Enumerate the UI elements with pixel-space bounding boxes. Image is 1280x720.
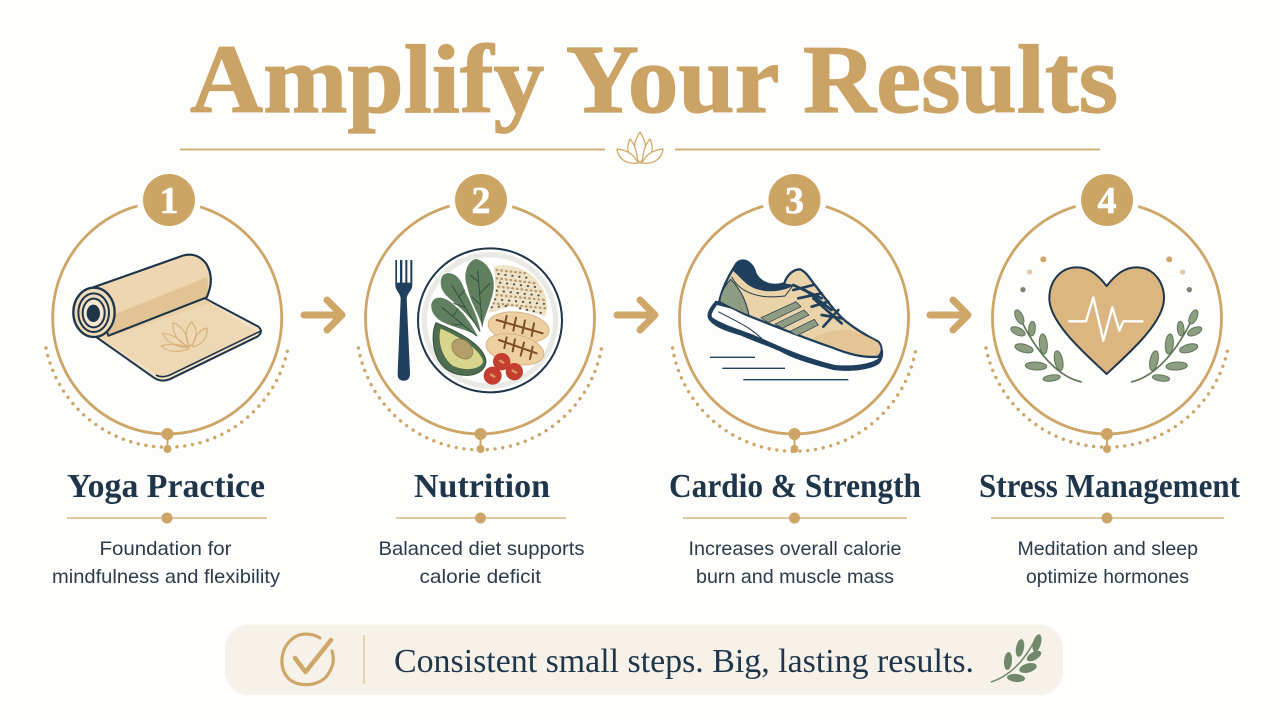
callout text: Consistent small steps. Big, lasting results. [394, 643, 974, 680]
sole [708, 301, 883, 371]
arrow 1 [304, 300, 342, 330]
spinach [431, 258, 494, 338]
right branch [1131, 309, 1203, 382]
badge 4: 4 [1098, 180, 1116, 222]
pulse line [1068, 297, 1143, 341]
badge 3 [762, 168, 826, 232]
heading 1: Yoga Practice [67, 468, 265, 505]
decorative dots [1020, 256, 1192, 292]
step 4: stress management [979, 168, 1241, 588]
badge 3: 3 [785, 180, 804, 222]
ring 1 [46, 202, 288, 449]
description 3: burn and muscle mass [696, 566, 894, 588]
icon: lotus ornament [617, 132, 663, 163]
lotus on mat [161, 322, 207, 351]
heel patch [720, 279, 749, 316]
title: Amplify Your Results [190, 26, 1118, 133]
speed lines [710, 357, 848, 380]
icon: yoga mat [73, 255, 261, 381]
laces [793, 285, 842, 327]
description 2 [378, 538, 585, 588]
badge 1 [137, 168, 201, 232]
badge 2: 2 [472, 180, 490, 222]
icon: check circle [282, 634, 333, 685]
toe cap [813, 329, 881, 356]
description 3 [688, 538, 902, 588]
ring 4 [986, 202, 1228, 449]
step 2: nutrition [358, 168, 602, 588]
ring nodes 4 [1101, 428, 1113, 453]
upper [719, 261, 881, 357]
callout: bottom banner [225, 624, 1063, 695]
chicken [486, 308, 551, 346]
step 1: yoga practice [46, 168, 288, 588]
tomatoes [493, 353, 510, 370]
divider 4 [991, 512, 1224, 524]
badge 4 [1075, 168, 1139, 232]
description 4 [1018, 538, 1198, 588]
step 3: cardio and strength [669, 168, 921, 588]
collar [732, 261, 795, 291]
description 2: calorie deficit [420, 566, 542, 588]
badge 2 [449, 168, 513, 232]
fork [395, 260, 412, 381]
heading 2: Nutrition [414, 468, 550, 505]
heading 4: Stress Management [979, 468, 1241, 505]
ring nodes 3 [788, 428, 800, 453]
divider 2 [396, 512, 566, 524]
description 3: Increases overall calorie [688, 538, 902, 560]
rice [488, 265, 547, 317]
description 1: mindfulness and flexibility [52, 566, 280, 588]
description 1 [52, 538, 280, 588]
ring 2 [358, 202, 602, 450]
description 4: optimize hormones [1026, 566, 1189, 588]
ring 3 [672, 202, 916, 451]
arrow 3 [930, 300, 968, 330]
stripes [761, 302, 818, 336]
description 1: Foundation for [100, 538, 232, 560]
heading 3: Cardio & Strength [669, 468, 921, 505]
arrow 2 [617, 300, 655, 330]
ring nodes 1 [162, 428, 174, 453]
left branch [1010, 309, 1082, 382]
divider 3 [683, 512, 907, 524]
heart [1049, 267, 1164, 374]
ring nodes 2 [474, 428, 486, 453]
title divider with lotus [180, 132, 1100, 163]
icon: plate of food [395, 248, 562, 392]
plate [418, 248, 562, 392]
icon: leaf sprig [991, 633, 1043, 683]
icon: heart with pulse and leaves [1010, 256, 1203, 382]
avocado [433, 323, 486, 375]
description 2: Balanced diet supports [378, 538, 585, 560]
divider 1 [67, 512, 267, 524]
icon: running shoe [708, 261, 883, 380]
badge 1: 1 [160, 180, 178, 222]
description 4: Meditation and sleep [1018, 538, 1198, 560]
